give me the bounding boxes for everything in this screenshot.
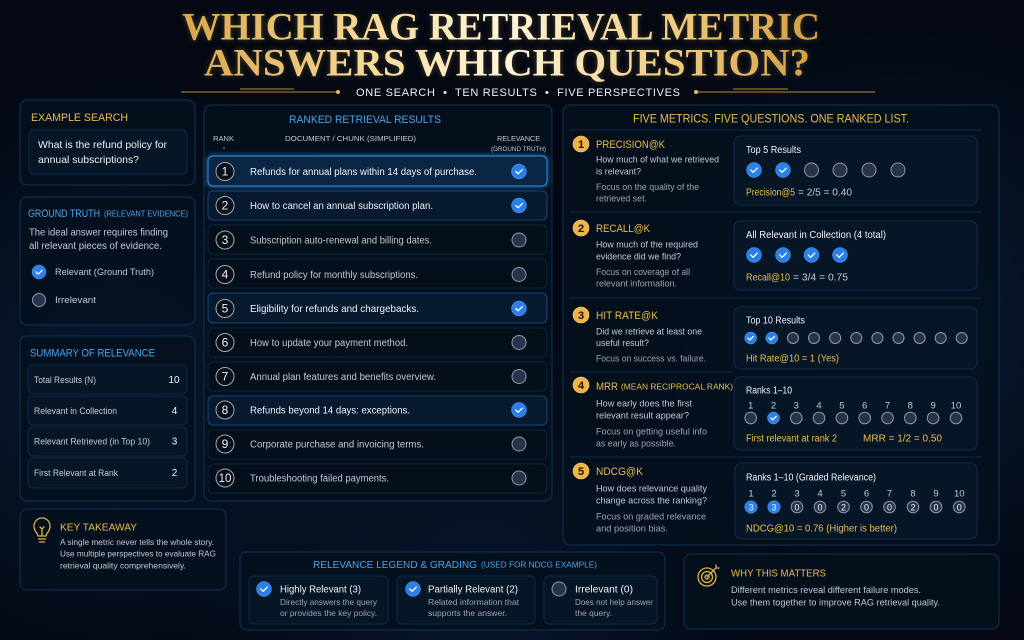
result row 3: Subscription auto-renewal and billing dates. <box>250 236 432 246</box>
why text: Use them together to improve RAG retrieval quality. <box>731 598 940 608</box>
ndcg example card: 2 <box>910 502 916 512</box>
result row 2: How to cancel an annual subscription plan. <box>250 201 433 212</box>
mrr example card: 7 <box>885 400 890 412</box>
hit rate example card: Hit Rate@10 = 1 (Yes) <box>746 354 839 364</box>
title: ANSWERS WHICH QUESTION? <box>204 42 810 84</box>
hit rate focus: Focus on success vs. failure. <box>596 354 706 364</box>
legend card: irrelevant: Irrelevant (0) <box>575 584 633 596</box>
ndcg example card: 4 <box>817 488 823 500</box>
metric: mrr <box>573 377 977 450</box>
mrr focus: Focus on getting useful info <box>596 426 707 438</box>
summary row: first relevant <box>28 458 187 488</box>
ndcg example card <box>735 463 977 539</box>
hit rate example card <box>734 307 977 369</box>
legend: relevant: Relevant (Ground Truth) <box>55 267 154 278</box>
mrr example card: MRR = 1/2 = 0.50 <box>863 434 942 444</box>
precision focus: retrieved set. <box>596 194 647 204</box>
result row 3 <box>208 225 547 254</box>
hit rate question: Did we retrieve at least one <box>596 326 702 338</box>
mrr focus: as early as possible. <box>596 438 676 450</box>
summary row: relevant in collection <box>28 396 187 425</box>
ndcg example card: 1 <box>748 488 754 500</box>
ndcg question: How does relevance quality <box>596 484 707 494</box>
ndcg example card: 0 <box>864 502 869 512</box>
metric: recall <box>573 220 977 290</box>
ndcg example card: NDCG@10 = 0.76 (Higher is better) <box>746 524 897 534</box>
ground truth description: The ideal answer requires finding <box>29 228 168 238</box>
mrr question: How early does the first <box>596 398 692 410</box>
legend card: highly relevant <box>249 576 388 624</box>
precision focus <box>596 182 699 204</box>
result row 8: 8 <box>222 403 229 417</box>
column headers: RANK <box>213 134 234 143</box>
heading: five metrics: FIVE METRICS. FIVE QUESTIONS. ONE RANKED LIST. <box>633 114 909 126</box>
mrr example card: 5 <box>839 400 845 412</box>
heading: relevance legend: RELEVANCE LEGEND & GRADING <box>313 559 477 571</box>
heading: summary: SUMMARY OF RELEVANCE <box>30 348 155 360</box>
heading: ground truth: GROUND TRUTH <box>28 208 100 220</box>
result row 6: How to update your payment method. <box>250 338 408 349</box>
badge 5: 5 <box>578 466 584 478</box>
legend card: irrelevant: Does not help answer <box>575 597 653 607</box>
ndcg question <box>596 484 707 506</box>
recall question: How much of the required <box>596 240 698 250</box>
badge 3: 3 <box>578 310 584 322</box>
metric: ndcg <box>573 463 977 539</box>
result row 7: 7 <box>222 370 229 384</box>
legend: irrelevant <box>32 294 96 306</box>
icon: light bulb <box>34 518 50 542</box>
hit rate name: HIT RATE@K <box>596 310 659 322</box>
result row 4 <box>208 259 547 288</box>
recall example card: Recall@10 <box>746 272 790 284</box>
mrr name: MRR <box>596 381 618 393</box>
summary row: relevant in collection: Relevant in Collection <box>34 406 117 417</box>
metric: hit rate <box>573 307 977 369</box>
ndcg example card: 9 <box>933 488 939 500</box>
mrr example card: 8 <box>908 400 913 412</box>
legend card: irrelevant: the query. <box>575 608 612 618</box>
ndcg example card: 3 <box>748 502 754 512</box>
heading: why this matters: WHY THIS MATTERS <box>731 568 826 580</box>
panel: ground truth: all relevant pieces of evidence. <box>29 241 162 252</box>
hit rate example card: Top 10 Results <box>746 316 805 326</box>
ndcg example card: 0 <box>794 502 800 512</box>
recall focus: Focus on coverage of all <box>596 267 690 278</box>
mrr example card: 2 <box>771 400 776 412</box>
why text: Different metrics reveal different failure modes. <box>731 585 921 596</box>
ndcg example card: 0 <box>957 502 962 512</box>
mrr example card: 10 <box>951 400 961 412</box>
legend card: highly relevant: Highly Relevant (3) <box>280 584 361 596</box>
heading: ground truth <box>28 208 188 220</box>
query box <box>29 130 187 174</box>
summary row: first relevant: First Relevant at Rank <box>34 468 118 479</box>
badge 1: 1 <box>578 139 584 151</box>
icon: target with arrow <box>698 565 719 586</box>
mrr name <box>596 381 733 393</box>
recall name: RECALL@K <box>596 223 651 235</box>
legend card: highly relevant: or provides the key policy. <box>280 608 377 618</box>
legend card: partially relevant: Partially Relevant (2) <box>428 584 518 596</box>
recall focus: relevant information. <box>596 278 677 290</box>
recall focus <box>596 267 690 290</box>
result row 10 <box>208 464 547 493</box>
legend card: partially relevant: supports the answer. <box>428 608 507 618</box>
query box: What is the refund policy for <box>38 139 167 151</box>
heading: ground truth: (RELEVANT EVIDENCE) <box>104 208 188 218</box>
mrr example card: 4 <box>816 400 822 412</box>
mrr name: (MEAN RECIPROCAL RANK) <box>621 382 733 392</box>
mrr question: relevant result appear? <box>596 410 689 422</box>
column headers <box>213 134 546 153</box>
badge 4: 4 <box>578 380 585 392</box>
precision example card <box>734 136 977 205</box>
precision focus: Focus on the quality of the <box>596 182 699 193</box>
legend: irrelevant: Irrelevant <box>55 295 96 306</box>
heading: relevance legend: (USED FOR NDCG EXAMPLE) <box>481 560 597 570</box>
metric: precision <box>573 136 977 205</box>
heading: ranked results: RANKED RETRIEVAL RESULTS <box>289 114 441 126</box>
result row 1: 1 <box>222 164 229 178</box>
takeaway text <box>60 537 216 570</box>
legend: relevant <box>32 265 154 279</box>
ndcg example card: 3 <box>771 502 777 512</box>
summary row: total <box>28 365 187 394</box>
badge 3 <box>573 307 589 323</box>
takeaway text: Use multiple perspectives to evaluate RAG <box>60 548 216 558</box>
ndcg example card: 10 <box>954 488 965 500</box>
result row 7 <box>208 362 547 391</box>
ndcg focus <box>596 512 706 534</box>
ndcg example card: 5 <box>841 488 846 500</box>
ndcg example card: 2 <box>841 502 846 512</box>
mrr example card <box>734 377 977 450</box>
heading: relevance legend <box>313 559 597 571</box>
result row 3: 3 <box>222 233 229 247</box>
result row 8 <box>208 396 547 425</box>
panel: five metrics <box>563 105 999 545</box>
mrr question <box>596 398 692 422</box>
panel: key takeaway <box>20 509 226 590</box>
precision question: How much of what we retrieved <box>596 154 719 166</box>
precision example card: = 2/5 = 0.40 <box>798 188 852 198</box>
mrr example card: Ranks 1–10 <box>746 386 792 396</box>
ndcg example card: 8 <box>910 488 916 500</box>
summary row: total: 10 <box>168 375 180 386</box>
why text <box>731 585 940 608</box>
heading: example search: EXAMPLE SEARCH <box>31 112 128 124</box>
badge 2 <box>573 220 589 236</box>
result row 1: Refunds for annual plans within 14 days of purchase. <box>250 167 477 178</box>
hit rate question <box>596 326 702 349</box>
recall example card: All Relevant in Collection (4 total) <box>746 230 886 241</box>
result row 5: 5 <box>222 302 229 316</box>
result row 8: Refunds beyond 14 days: exceptions. <box>250 406 410 416</box>
result row 10: 10 <box>219 473 231 485</box>
badge 5 <box>573 463 589 479</box>
ndcg question: change across the ranking? <box>596 496 707 506</box>
recall example card: = 3/4 = 0.75 <box>793 272 848 284</box>
ndcg example card: 6 <box>864 488 869 500</box>
summary row: first relevant: 2 <box>172 468 178 479</box>
panel: example search <box>20 100 195 185</box>
panel: summary of relevance <box>20 336 195 501</box>
column headers: (GROUND TRUTH) <box>491 146 546 153</box>
mrr example card: 1 <box>748 400 753 412</box>
summary row: relevant retrieved: Relevant Retrieved (in Top 10) <box>34 436 150 448</box>
ndcg name: NDCG@K <box>596 466 644 478</box>
result row 10: Troubleshooting failed payments. <box>250 474 389 484</box>
recall example card <box>734 221 977 290</box>
result row 4: Refund policy for monthly subscriptions. <box>250 270 418 281</box>
ndcg example card: Ranks 1–10 (Graded Relevance) <box>746 472 876 484</box>
subtitle with gold rules <box>181 87 875 99</box>
recall question: evidence did we find? <box>596 252 681 262</box>
takeaway text: A single metric never tells the whole story. <box>60 537 214 547</box>
precision example card: Top 5 Results <box>746 145 801 156</box>
result row 9 <box>208 430 547 459</box>
panel: relevance legend <box>240 552 665 630</box>
title <box>182 6 820 84</box>
mrr example card: 9 <box>930 400 936 412</box>
subtitle with gold rules: ONE SEARCH • TEN RESULTS • FIVE PERSPECTIVES <box>356 87 680 99</box>
ndcg focus: and position bias. <box>596 524 668 534</box>
ndcg example card: 2 <box>771 488 777 500</box>
result row 6 <box>208 328 547 357</box>
mrr example card: First relevant at rank 2 <box>746 434 837 444</box>
summary row: relevant retrieved <box>28 427 187 456</box>
hit rate question: useful result? <box>596 338 649 349</box>
result row 2 <box>208 191 547 220</box>
ndcg example card: 0 <box>817 502 823 512</box>
mrr focus <box>596 426 707 450</box>
legend card: partially relevant <box>397 576 535 624</box>
result row 5 <box>208 293 547 323</box>
mrr example card: 3 <box>794 400 799 412</box>
badge 1 <box>573 136 589 152</box>
result row 5: Eligibility for refunds and chargebacks. <box>250 304 419 315</box>
precision question: is relevant? <box>596 166 641 178</box>
summary row: relevant in collection: 4 <box>172 406 178 417</box>
result row 9: Corporate purchase and invoicing terms. <box>250 440 424 450</box>
result row 1 <box>208 156 547 186</box>
result row 7: Annual plan features and benefits overview. <box>250 372 436 383</box>
legend card: partially relevant: Related information that <box>428 597 520 607</box>
summary row: total: Total Results (N) <box>34 375 96 386</box>
result row 2: 2 <box>222 198 229 212</box>
heading: key takeaway: KEY TAKEAWAY <box>60 522 137 534</box>
takeaway text: retrieval quality comprehensively. <box>60 560 186 570</box>
ndcg example card: 7 <box>887 488 892 500</box>
title: WHICH RAG RETRIEVAL METRIC <box>182 6 820 48</box>
result row 9: 9 <box>222 437 229 451</box>
column headers: RELEVANCE <box>497 134 540 143</box>
summary row: relevant retrieved: 3 <box>172 436 178 448</box>
legend card: highly relevant: Directly answers the query <box>280 597 378 607</box>
precision question <box>596 154 719 178</box>
result row 4: 4 <box>222 268 229 282</box>
ndcg example card: 0 <box>933 502 939 512</box>
result row 6: 6 <box>222 336 229 350</box>
ndcg example card: 3 <box>794 488 800 500</box>
badge 4 <box>573 377 589 393</box>
legend card: irrelevant <box>544 576 657 624</box>
panel: ranked retrieval results <box>204 105 552 501</box>
precision name: PRECISION@K <box>596 139 666 151</box>
query box: annual subscriptions? <box>38 154 139 166</box>
badge 2: 2 <box>578 223 584 235</box>
ndcg example card: 0 <box>887 502 892 512</box>
mrr example card: 6 <box>862 400 867 412</box>
ndcg focus: Focus on graded relevance <box>596 512 706 522</box>
column headers: DOCUMENT / CHUNK (SIMPLIFIED) <box>285 134 417 143</box>
panel: ground truth <box>20 197 195 325</box>
panel: why this matters <box>684 554 999 629</box>
precision example card: Precision@5 <box>746 188 795 198</box>
recall question <box>596 240 698 262</box>
